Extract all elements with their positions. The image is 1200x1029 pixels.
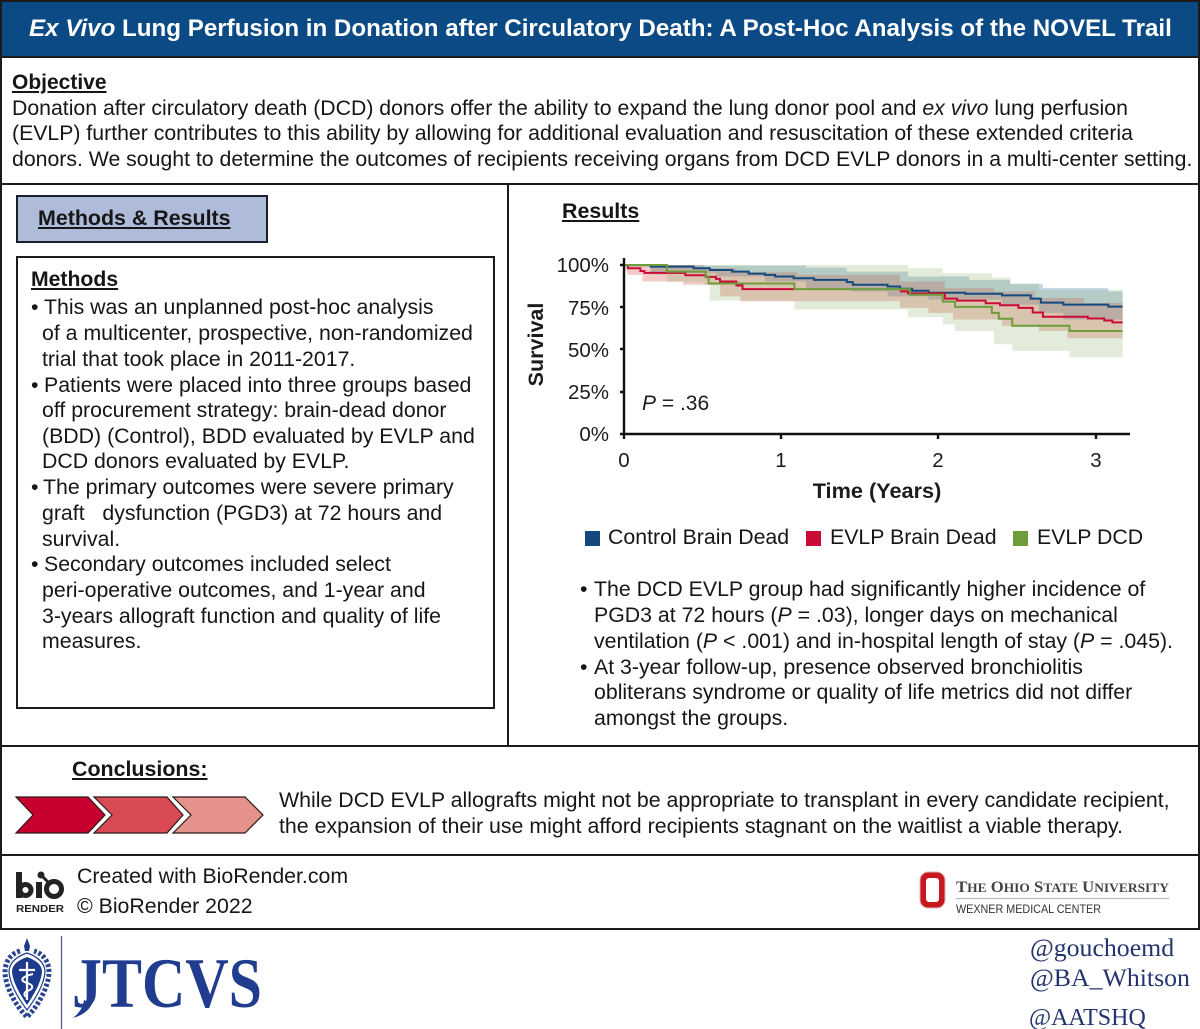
methods bullet 1: trial that took place in 2011-2017. [42, 347, 355, 371]
biorender credit [77, 864, 348, 918]
y axis tick labels: 75% [568, 297, 609, 320]
curve: evlp brain dead [624, 265, 1123, 322]
biorender credit: © BioRender 2022 [77, 894, 253, 918]
methods bullet 3: graft dysfunction (PGD3) at 72 hours and [42, 501, 442, 525]
legend: evlp brain dead: EVLP Brain Dead [830, 525, 997, 549]
methods bullet 1: This was an unplanned post-hoc analysis [44, 295, 434, 319]
methods bullet 2: Patients were placed into three groups based [44, 373, 471, 397]
methods bullet 2 [31, 373, 475, 473]
methods bullet 2: • [31, 373, 38, 397]
methods bullet 3 [31, 475, 454, 551]
methods bullet 4: 3-years allograft function and quality of life [42, 604, 441, 628]
logo: biorender [16, 872, 64, 915]
icon: chevron arrows [14, 796, 264, 834]
results bullet 2: amongst the groups. [594, 706, 788, 730]
methods bullet 3: • [31, 475, 38, 499]
methods bullet 4: measures. [42, 629, 141, 653]
results bullet 1: ventilation (P < .001) and in-hospital length of stay (P = .045). [594, 629, 1173, 653]
results bullet 1: PGD3 at 72 hours (P = .03), longer days on mechanical [594, 603, 1118, 627]
confidence bands [624, 265, 1123, 357]
methods bullet 4 [31, 552, 441, 653]
results bullet 2: obliterans syndrome or quality of life metrics did not differ [594, 680, 1132, 704]
objective text [12, 96, 1192, 170]
curve: evlp dcd [624, 265, 1123, 331]
methods bullet 3: survival. [42, 527, 120, 551]
label text: Methods & Results [38, 206, 231, 230]
conclusion text: the expansion of their use might afford recipients stagnant on the waitlist a viable therapy. [279, 814, 1123, 838]
title banner [0, 0, 1200, 58]
conclusions heading: Conclusions: [72, 757, 207, 781]
methods bullet 4: • [31, 552, 38, 576]
social handles: @BA_Whitson [1030, 963, 1190, 992]
objective text: (EVLP) further contributes to this ability by allowing for additional evaluation and resuscitation of these extended criteria [12, 121, 1133, 145]
methods and results label box [16, 195, 268, 243]
y axis tick labels: 100% [557, 254, 609, 277]
methods bullet 4: Secondary outcomes included select [44, 552, 391, 576]
legend: control brain dead: Control Brain Dead [608, 525, 789, 549]
x axis tick labels [618, 449, 1102, 472]
chart legend [585, 525, 1143, 549]
methods bullet 2: (BDD) (Control), BDD evaluated by EVLP and [42, 424, 475, 448]
biorender credit: Created with BioRender.com [77, 864, 348, 888]
methods bullet 4: peri-operative outcomes, and 1-year and [42, 578, 426, 602]
x axis tick labels: 0 [618, 449, 630, 472]
methods bullet 3: The primary outcomes were severe primary [43, 475, 454, 499]
logo: jtcvs emblem [2, 936, 62, 1029]
y axis tick labels: 0% [579, 423, 609, 446]
methods bullet 2: off procurement strategy: brain-dead donor [42, 398, 446, 422]
methods bullet 1: of a multicenter, prospective, non-randomized [42, 321, 473, 345]
x axis tick labels: 1 [775, 449, 787, 472]
objective text: donors. We sought to determine the outcomes of recipients receiving organs from DCD EVLP donors in a multi-center setting. [12, 146, 1192, 170]
x axis tick labels: 3 [1090, 449, 1102, 472]
logo: ohio state wexner: THE OHIO STATE UNIVERSITY [956, 879, 1169, 896]
conclusion text [279, 788, 1170, 838]
logo: ohio state wexner: WEXNER MEDICAL CENTER [956, 904, 1101, 916]
conclusion text: While DCD EVLP allografts might not be appropriate to transplant in every candidate recipient, [279, 788, 1170, 812]
social handles: @gouchoemd [1030, 933, 1174, 962]
survival curves [624, 265, 1123, 331]
methods bullet 1: • [31, 295, 38, 319]
p value: P = .36 [642, 392, 709, 415]
methods bullet 2: DCD donors evaluated by EVLP. [42, 449, 349, 473]
objective heading: Objective [12, 71, 107, 94]
y axis tick labels: 25% [568, 381, 609, 404]
y axis title: Survival [524, 303, 548, 386]
y axis tick labels: 50% [568, 339, 609, 362]
x axis title: Time (Years) [813, 478, 941, 503]
axes [620, 258, 1130, 439]
x axis tick labels: 2 [932, 449, 944, 472]
objective text: Donation after circulatory death (DCD) donors offer the ability to expand the lung donor pool and ex vivo lung perfusion [12, 96, 1128, 120]
y axis tick labels [557, 254, 609, 446]
curve: control brain dead [624, 265, 1123, 307]
objective section [12, 71, 1192, 170]
legend: evlp dcd: EVLP DCD [1037, 525, 1143, 549]
results bullet 1 [580, 577, 1173, 653]
survival chart [524, 254, 1130, 503]
social handles [1029, 933, 1190, 1029]
methods heading: Methods [31, 268, 118, 291]
results heading: Results [562, 199, 639, 223]
results bullet 1: The DCD EVLP group had significantly higher incidence of [594, 577, 1145, 601]
logo: ohio state wexner [920, 872, 1169, 916]
results bullet 2 [580, 655, 1132, 730]
panel: methods [16, 256, 495, 709]
title banner: Ex Vivo Lung Perfusion in Donation after Circulatory Death: A Post-Hoc Analysis of the NOVEL Trail [29, 15, 1172, 42]
logo: biorender: RENDER [16, 903, 64, 915]
results bullet 1: • [580, 577, 587, 601]
results bullet 2: At 3-year follow-up, presence observed bronchiolitis [594, 655, 1083, 679]
results bullet 2: • [580, 655, 587, 679]
methods bullet 1 [31, 295, 473, 371]
